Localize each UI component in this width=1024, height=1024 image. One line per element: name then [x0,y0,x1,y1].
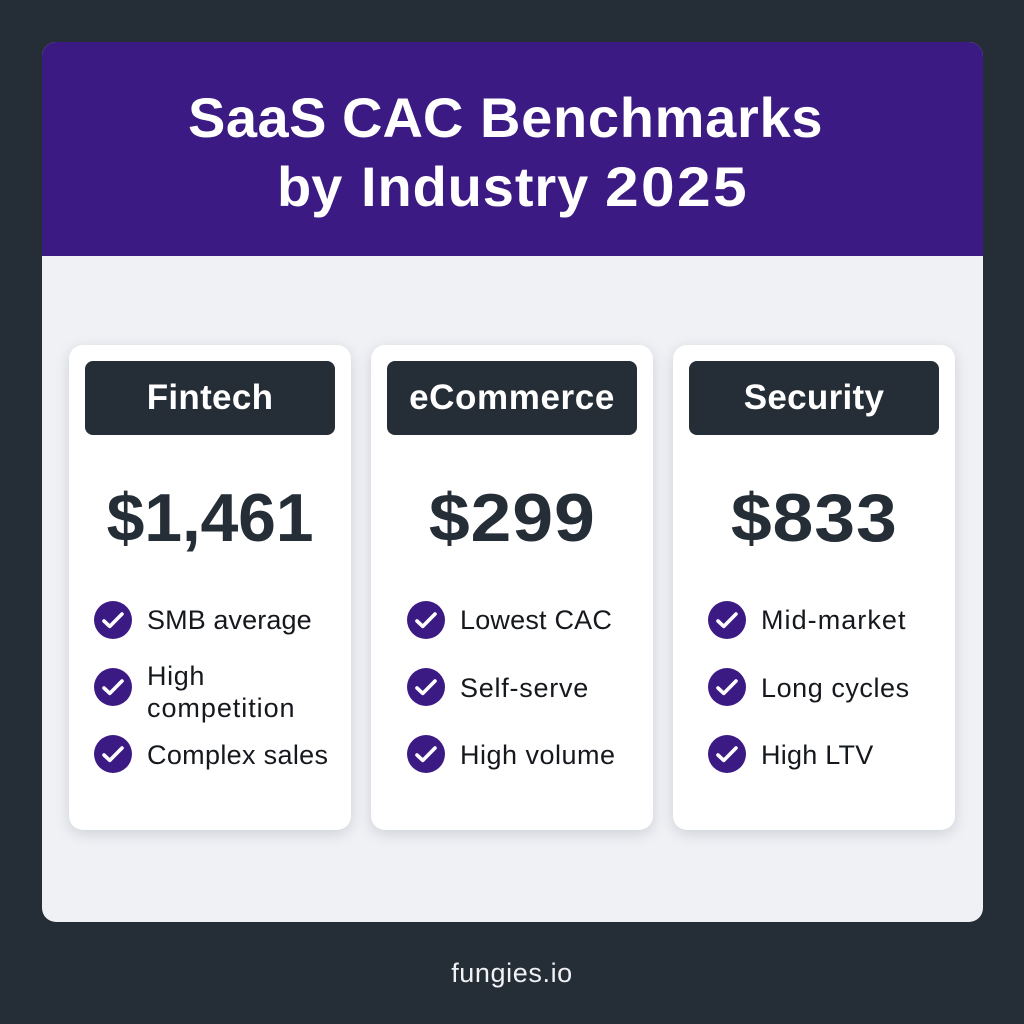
heading: Fintech: Fintech [147,378,273,417]
text: Self-serve: Self-serve [460,673,589,703]
title: Industry [361,155,589,218]
text: High volume: High volume [460,740,616,770]
title: Benchmarks [480,86,823,149]
title [188,86,823,218]
text: Mid-market: Mid-market [761,605,907,635]
value: $299: $299 [429,480,595,556]
title: 2025 [605,155,749,218]
icon: check [407,601,445,639]
heading: eCommerce: eCommerce [409,378,615,417]
text: High LTV: High LTV [761,740,874,770]
icon: check [708,735,746,773]
value: $833: $833 [731,480,897,556]
text: High competition: High [147,661,205,691]
icon: check [407,668,445,706]
title: CAC [342,86,463,149]
title: SaaS [188,86,327,149]
text: Lowest CAC: Lowest CAC [460,605,612,635]
heading: Fintech [85,361,335,435]
panel: Fintech card [69,345,351,830]
icon: check [407,735,445,773]
icon: check [708,601,746,639]
main panel [42,42,983,922]
footer: fungies.io: fungies.io [451,958,573,988]
text: Complex sales: Complex sales [147,740,328,770]
heading: Security [689,361,939,435]
icon: check [94,668,132,706]
value: $1,461: $1,461 [107,480,313,556]
heading: eCommerce [387,361,637,435]
icon: check [94,735,132,773]
text: SMB average: SMB average [147,605,312,635]
panel: eCommerce card [371,345,653,830]
icon: check [94,601,132,639]
panel: Security card [673,345,955,830]
header band [42,42,983,256]
text: High competition [147,661,296,723]
text: Long cycles: Long cycles [761,673,910,703]
icon: check [708,668,746,706]
heading: Security: Security [744,378,884,417]
text: High competition: competition [147,693,296,723]
title: by [277,155,342,218]
